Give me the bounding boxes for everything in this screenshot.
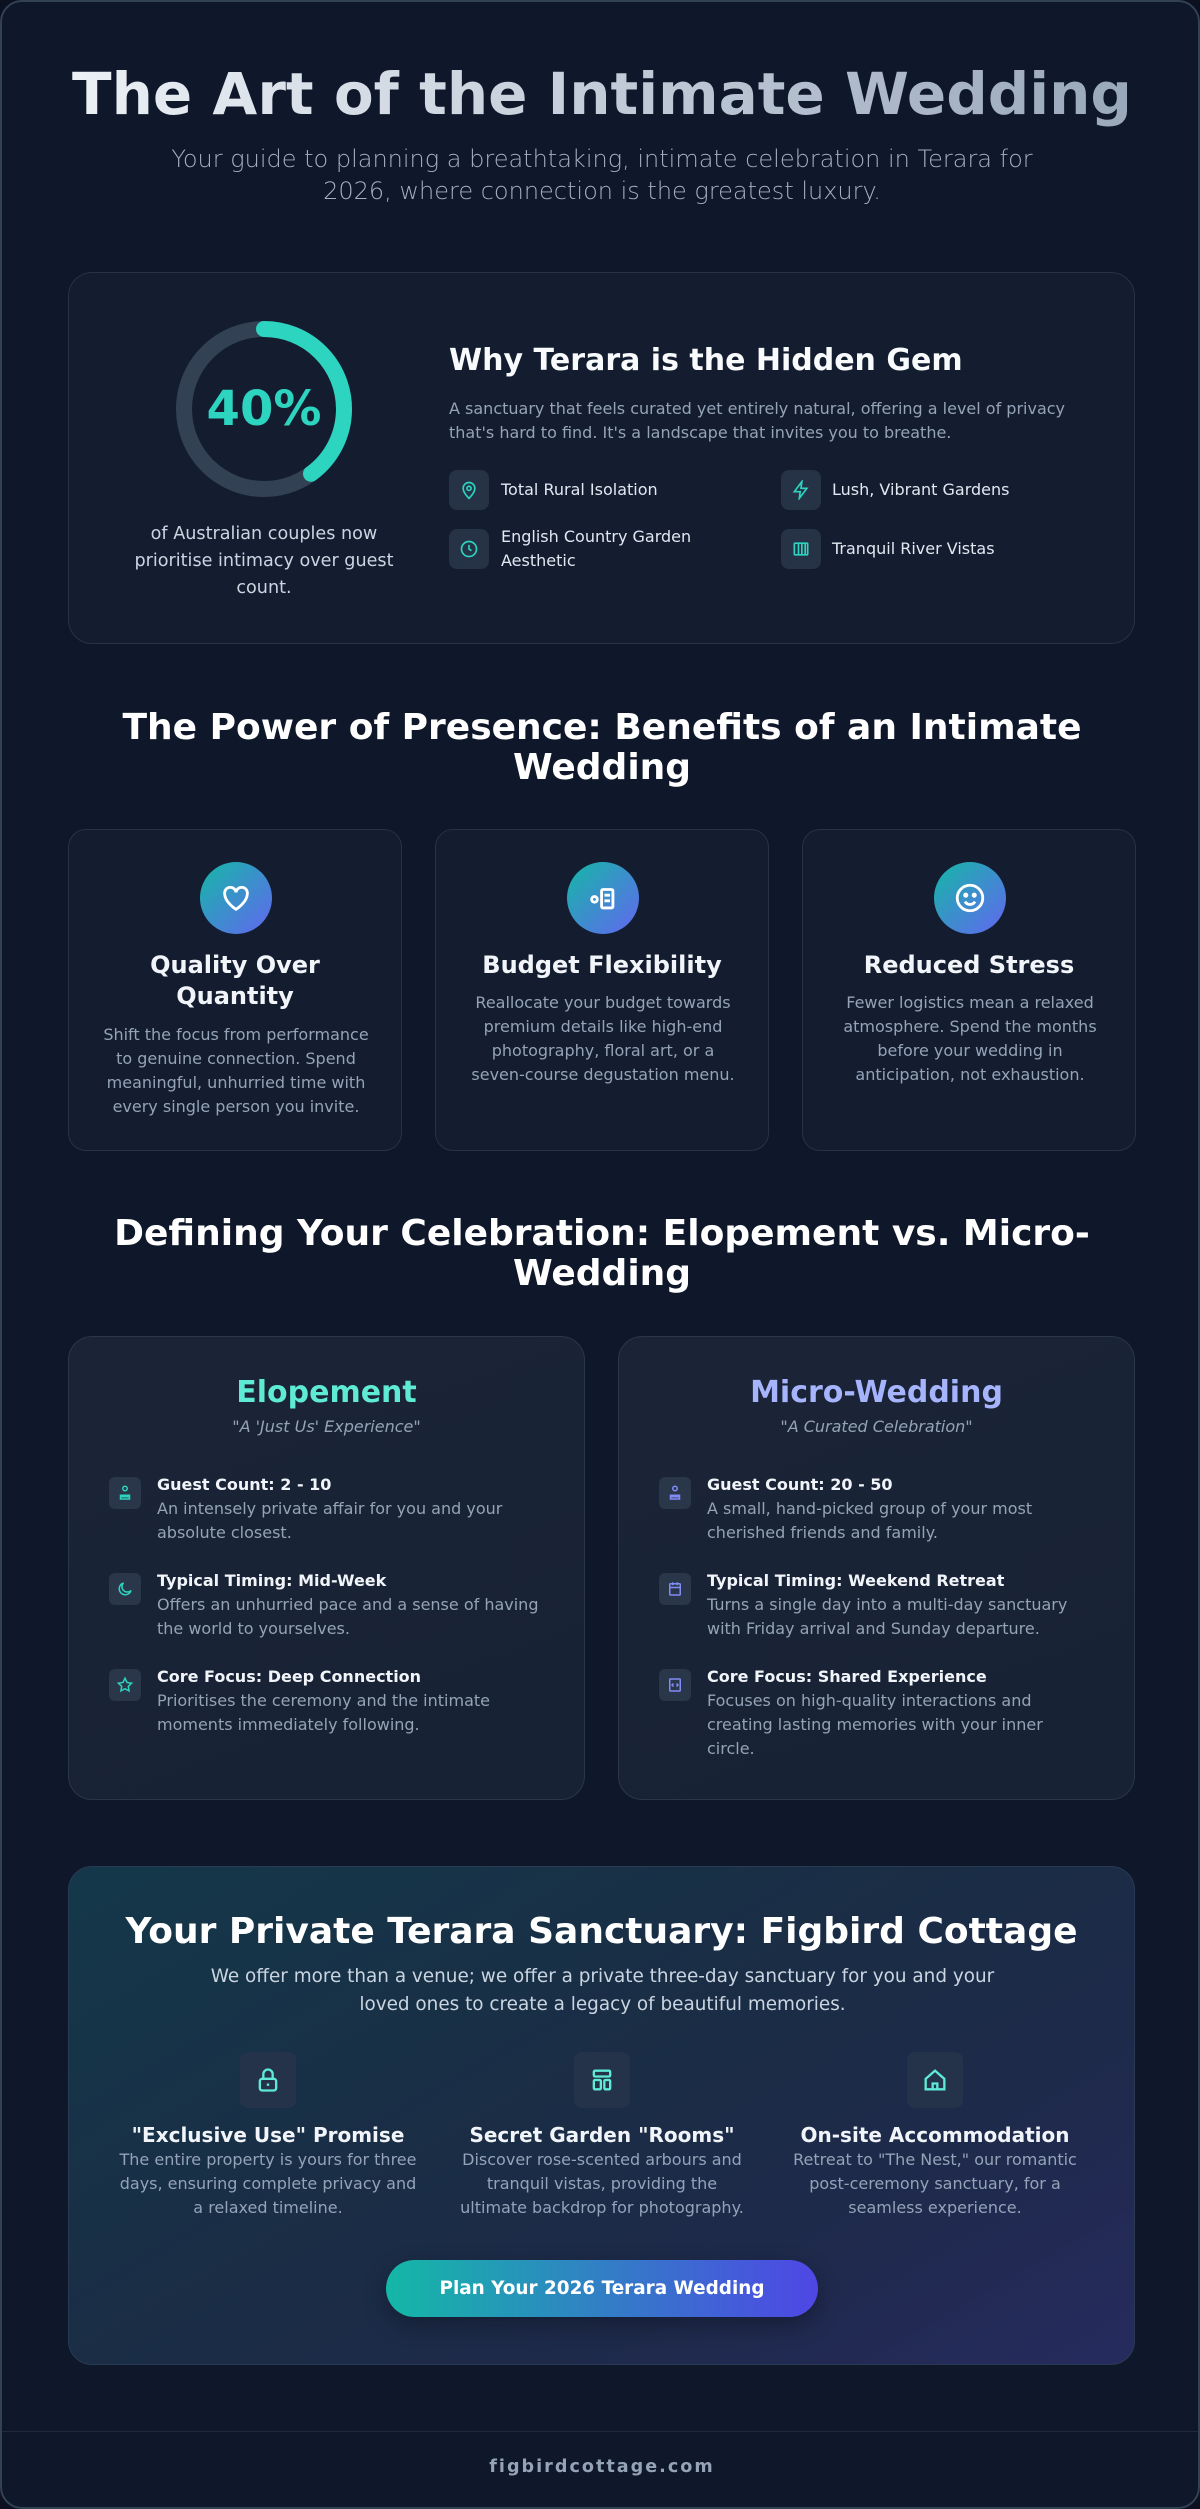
panel: quality over quantity: Shift the focus from performance to genuine connection. Spend meaningful, unhurried time with every single person you invite.: [103, 1025, 369, 1116]
description: A sanctuary that feels curated yet entirely natural, offering a level of privacy that's hard to find. It's a landscape that invites you to breathe.: [449, 399, 1065, 442]
feature: rural isolation: Total Rural Isolation: [501, 480, 658, 499]
icon: layout: [574, 2052, 630, 2108]
icon: house: [907, 2052, 963, 2108]
panel: budget flexibility: Reallocate your budget towards premium details like high-end photography, floral art, or a seven-course degustation menu.: [471, 993, 735, 1084]
feature: rural isolation: [449, 470, 658, 510]
item: guest count: [659, 1475, 1032, 1542]
panel: elopement: "A 'Just Us' Experience": [232, 1417, 421, 1436]
panel: budget flexibility: [435, 829, 769, 1151]
feature: secret garden: Secret Garden "Rooms": [469, 2123, 735, 2147]
button: CTA: Plan Your 2026 Terara Wedding: [439, 2278, 765, 2299]
title: The Art of the Intimate Wedding: [72, 60, 1132, 128]
feature: exclusive use: [119, 2052, 416, 2217]
item: guest count: Guest Count: 20 - 50: [707, 1475, 893, 1494]
feature: accommodation: On-site Accommodation: [801, 2123, 1069, 2147]
panel: reduced stress: [802, 829, 1136, 1151]
item: focus: [109, 1667, 490, 1734]
subtitle: We offer more than a venue; we offer a private three-day sanctuary for you and your loved ones to create a legacy of beautiful memories.: [211, 1966, 994, 2015]
footer: figbirdcottage.com: [489, 2457, 715, 2477]
panel: reduced stress: Reduced Stress: [864, 951, 1074, 979]
feature: secret garden: Discover rose-scented arbours and tranquil vistas, providing the ultimate backdrop for photography.: [460, 2150, 744, 2217]
feature: accommodation: [793, 2052, 1077, 2217]
item: focus: Core Focus: Deep Connection: [157, 1667, 421, 1686]
feature: river vistas: Tranquil River Vistas: [832, 539, 995, 558]
item: timing: Typical Timing: Weekend Retreat: [707, 1571, 1004, 1590]
item: timing: Turns a single day into a multi-day sanctuary with Friday arrival and Sunday departure.: [707, 1595, 1067, 1638]
icon: smile: [934, 862, 1006, 934]
icon: money: [567, 862, 639, 934]
item: timing: [659, 1571, 1067, 1638]
item: guest count: A small, hand-picked group of your most cherished friends and family.: [707, 1499, 1032, 1542]
button: CTA: [386, 2260, 818, 2317]
item: focus: Core Focus: Shared Experience: [707, 1667, 987, 1686]
feature: exclusive use: The entire property is yours for three days, ensuring complete privacy and a relaxed timeline.: [120, 2150, 416, 2217]
chart: 40% ring: 40%: [207, 381, 321, 437]
item: guest count: An intensely private affair for you and your absolute closest.: [157, 1499, 502, 1542]
panel: quality over quantity: Quantity: [176, 982, 294, 1010]
icon: heart: [200, 862, 272, 934]
panel: quality over quantity: Quality Over: [150, 951, 320, 979]
panel: figbird cottage CTA: [68, 1866, 1135, 2365]
panel: quality over quantity: [68, 829, 402, 1151]
panel: elopement: [68, 1336, 585, 1800]
feature: gardens: [781, 470, 1009, 510]
feature: english garden: English Country Garden Aesthetic: [501, 527, 691, 570]
panel: micro-wedding: Micro-Wedding: [750, 1375, 1003, 1410]
item: timing: [109, 1571, 538, 1638]
heading: benefits: The Power of Presence: Benefits of an Intimate Wedding: [122, 707, 1082, 788]
caption: of Australian couples now prioritise intimacy over guest count.: [134, 524, 394, 598]
item: focus: [659, 1667, 1043, 1758]
panel: micro-wedding: "A Curated Celebration": [780, 1417, 973, 1436]
item: guest count: Guest Count: 2 - 10: [157, 1475, 331, 1494]
subtitle: Your guide to planning a breathtaking, intimate celebration in Terara for 2026, where connection is the greatest luxury.: [171, 145, 1033, 205]
item: focus: Focuses on high-quality interactions and creating lasting memories with your inner circle.: [707, 1691, 1043, 1758]
item: focus: Prioritises the ceremony and the intimate moments immediately following.: [157, 1691, 490, 1734]
item: timing: Typical Timing: Mid-Week: [157, 1571, 386, 1590]
item: timing: Offers an unhurried pace and a sense of having the world to yourselves.: [157, 1595, 538, 1638]
feature: river vistas: [781, 529, 995, 569]
chart: 40% ring: [176, 321, 352, 497]
panel: micro-wedding: [618, 1336, 1135, 1800]
panel: why terara: [68, 272, 1135, 644]
panel: reduced stress: Fewer logistics mean a relaxed atmosphere. Spend the months before your wedding in anticipation, not exhaustion.: [843, 993, 1097, 1084]
feature: secret garden: [460, 2052, 744, 2217]
heading: Why Terara is the Hidden Gem: [449, 343, 963, 378]
icon: lock: [240, 2052, 296, 2108]
feature: accommodation: Retreat to "The Nest," our romantic post-ceremony sanctuary, for a seamless experience.: [793, 2150, 1077, 2217]
feature: gardens: Lush, Vibrant Gardens: [832, 480, 1009, 499]
feature: exclusive use: "Exclusive Use" Promise: [132, 2123, 404, 2147]
panel: budget flexibility: Budget Flexibility: [482, 951, 722, 979]
item: guest count: [109, 1475, 502, 1542]
heading: comparison: Defining Your Celebration: Elopement vs. Micro-Wedding: [114, 1213, 1090, 1294]
panel: elopement: Elopement: [236, 1375, 417, 1410]
heading: Your Private Terara Sanctuary: Figbird Cottage: [125, 1911, 1078, 1952]
